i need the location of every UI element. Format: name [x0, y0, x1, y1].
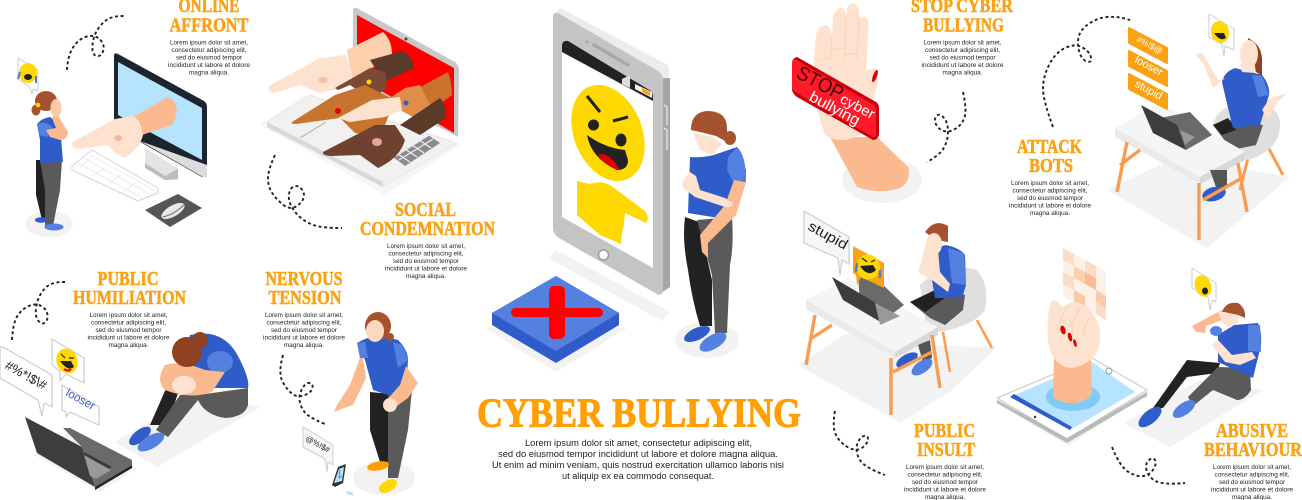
text block: online affront: sed do eiusmod tempor [176, 56, 242, 62]
icon: stupid bubble: stupid [806, 218, 851, 252]
text block: public humiliation: magna aliqua. [108, 343, 149, 349]
text block: nervous tension: incididunt ut labore et dolore [263, 336, 346, 342]
illustration: sitting woman [115, 332, 260, 467]
icon: yellow pointing hand [577, 181, 648, 244]
panel: central phone scene [477, 8, 801, 481]
illustration: black laptop [25, 417, 137, 492]
text block: nervous tension: sed do eiusmod tempor [271, 328, 337, 334]
icon: stop sign: bullying [806, 89, 863, 129]
heading: social condemnation: SOCIAL [395, 199, 456, 221]
heading: nervous tension [266, 268, 342, 309]
icon: stupid bubble [804, 211, 851, 275]
panel: public humiliation [0, 268, 260, 492]
heading: stop cyber bullying: BULLYING [923, 14, 1004, 36]
text block: stop cyber bullying [922, 40, 1004, 76]
text block: public insult: Lorem ipsum dolor sit amet, [906, 465, 984, 471]
illustration: tablet [994, 358, 1150, 446]
text block: public insult: sed do eiusmod tempor [912, 480, 978, 486]
panel: public insult [798, 211, 997, 500]
heading: main title: CYBER BULLYING [477, 390, 801, 436]
icon: symbols bubble [303, 427, 333, 472]
text block: social condemnation: Lorem ipsum dolor sit amet, [387, 244, 465, 250]
panel: social condemnation [260, 8, 495, 280]
text block: abusive behaviour: Lorem ipsum dolor sit amet, [1213, 465, 1291, 471]
text block: social condemnation: magna aliqua. [406, 274, 446, 280]
text block: stop cyber bullying: consectetur adipiscing elit, [925, 48, 1000, 54]
dashed arrow [280, 355, 325, 424]
text block: online affront: magna aliqua. [189, 70, 229, 76]
illustration: sad woman standing [675, 111, 746, 358]
icon: laughing emoji bubble [52, 339, 84, 383]
heading: nervous tension: TENSION [268, 287, 342, 309]
icon: insult tags: #%!$@ [1135, 34, 1164, 56]
text block: social condemnation [385, 244, 468, 280]
illustration: sitting man [1124, 303, 1263, 447]
text block: online affront: incididunt ut labore et dolore [168, 63, 251, 69]
icon: laughing emoji [558, 74, 658, 192]
illustration: fist from tablet [1047, 300, 1100, 403]
illustration: smartphone [553, 8, 670, 295]
illustration: desk scene [1107, 38, 1290, 248]
icon: symbols bubble [0, 347, 52, 416]
panel: stop cyber bullying [792, 0, 1013, 203]
icon: insult tags [1129, 28, 1167, 109]
text block: public insult: consectetur adipiscing elit, [908, 472, 983, 478]
heading: public humiliation: HUMILIATION [73, 287, 186, 309]
text block: main description: Lorem ipsum dolor sit amet, consectetur adipiscing elit, [525, 438, 752, 448]
text block: nervous tension: consectetur adipiscing elit, [266, 320, 342, 326]
heading: nervous tension: NERVOUS [266, 268, 342, 290]
text block: social condemnation: consectetur adipiscing elit, [388, 252, 464, 258]
icon: stop sign [792, 57, 879, 140]
text block: social condemnation: sed do eiusmod tempor [393, 259, 459, 265]
icon: stop sign: STOP [793, 62, 847, 105]
text block: attack bots: incididunt ut labore et dolore [1009, 204, 1092, 210]
text block: public insult [904, 465, 987, 500]
dashed arrow [67, 16, 125, 70]
text block: main description: ut aliquip ex ea commodo consequat. [562, 471, 714, 481]
panel: online affront [18, 0, 251, 237]
text block: public humiliation [88, 313, 170, 349]
icon: symbols bubble: #%*!$\# [3, 358, 50, 393]
heading: attack bots: BOTS [1029, 155, 1073, 177]
text block: abusive behaviour: sed do eiusmod tempor [1219, 480, 1285, 486]
icon: crying emoji bubble [18, 58, 38, 94]
heading: public insult: INSULT [917, 439, 976, 461]
dashed arrow [927, 92, 965, 162]
text block: social condemnation: incididunt ut labore et dolore [385, 266, 468, 272]
text block: attack bots: consectetur adipiscing elit, [1012, 188, 1088, 194]
heading: social condemnation: CONDEMNATION [360, 218, 495, 240]
illustration: accusing hands [268, 32, 452, 168]
heading: abusive behaviour [1204, 420, 1302, 461]
text block: public humiliation: consectetur adipiscing elit, [91, 320, 166, 326]
illustration: phone shadow [548, 250, 670, 321]
text block: abusive behaviour: incididunt ut labore et dolore [1211, 488, 1294, 494]
text block: nervous tension [263, 313, 346, 349]
illustration: stop hand [814, 4, 922, 203]
text block: public humiliation: incididunt ut labore et dolore [88, 336, 170, 342]
illustration: keyboard [72, 150, 158, 201]
text block: public insult: incididunt ut labore et dolore [904, 488, 987, 494]
text block: stop cyber bullying: sed do eiusmod tempor [930, 56, 996, 62]
icon: stop sign: cyber [837, 91, 877, 123]
text block: attack bots [1009, 181, 1092, 217]
illustration: nervous woman [334, 312, 418, 496]
panel: nervous tension [263, 268, 418, 496]
text block: public humiliation: Lorem ipsum dolor sit amet, [90, 313, 168, 319]
heading: attack bots [1017, 136, 1082, 177]
panel: abusive behaviour [994, 248, 1302, 500]
icon: laughing emoji bubble [1208, 14, 1234, 56]
text block: attack bots: Lorem ipsum dolor sit amet, [1011, 181, 1089, 187]
illustration: pointing hand [72, 97, 177, 158]
text block: attack bots: sed do eiusmod tempor [1017, 196, 1083, 202]
heading: public humiliation [73, 268, 186, 309]
text block: public humiliation: sed do eiusmod tempor [96, 328, 162, 334]
text block: online affront: Lorem ipsum dolor sit amet, [170, 40, 248, 46]
illustration: monitor [114, 53, 207, 180]
text block: stop cyber bullying: Lorem ipsum dolor sit amet, [924, 40, 1002, 46]
icon: symbols bubble: @%!$# [304, 434, 332, 455]
illustration: laptop [260, 8, 460, 195]
text block: abusive behaviour [1211, 465, 1294, 500]
heading: social condemnation [360, 199, 495, 240]
text block: nervous tension: magna aliqua. [284, 343, 324, 349]
illustration: mouse and pad [145, 194, 202, 227]
illustration: embarrassed woman [25, 91, 73, 237]
heading: public humiliation: PUBLIC [98, 268, 158, 290]
text block: abusive behaviour: consectetur adipiscing elit, [1214, 472, 1290, 478]
dashed arrow [834, 411, 885, 475]
icon: looser bubble: looser [64, 387, 97, 413]
heading: attack bots: ATTACK [1017, 136, 1082, 158]
dashed arrow [1112, 447, 1185, 484]
illustration: desk with man [798, 223, 997, 423]
text block: attack bots: magna aliqua. [1030, 211, 1070, 217]
illustration: blue base with red cross [485, 276, 627, 372]
heading: online affront: AFFRONT [170, 14, 249, 36]
text block: stop cyber bullying: magna aliqua. [942, 70, 983, 76]
heading: public insult [914, 420, 976, 461]
icon: crying emoji bubble [853, 246, 884, 288]
text block: nervous tension: Lorem ipsum dolor sit amet, [265, 313, 343, 319]
text block: main description: sed do eiusmod tempor incididunt ut labore et dolore magna aliqua. [498, 449, 778, 459]
heading: online affront [170, 0, 249, 36]
icon: insult tags: stupid [1133, 78, 1164, 102]
heading: stop cyber bullying [911, 0, 1013, 36]
heading: public insult: PUBLIC [914, 420, 975, 442]
dashed arrow [1043, 17, 1130, 127]
text block: main description [492, 438, 784, 481]
text block: main description: Ut enim ad minim veniam, quis nostrud exercitation ullamco laboris nisi [492, 460, 784, 470]
icon: shocked emoji bubble [1192, 268, 1216, 310]
icon: broken phone [332, 464, 354, 496]
illustration: censored pixels [1063, 248, 1106, 320]
text block: stop cyber bullying: incididunt ut labore et dolore [922, 63, 1004, 69]
text block: online affront: consectetur adipiscing elit, [172, 48, 247, 54]
icon: insult tags: looser [1133, 54, 1165, 79]
icon: looser bubble [62, 385, 99, 425]
dashed arrow [12, 282, 65, 340]
text block: online affront [168, 40, 251, 76]
panel: attack bots [1009, 14, 1290, 248]
dashed arrow [268, 155, 342, 228]
